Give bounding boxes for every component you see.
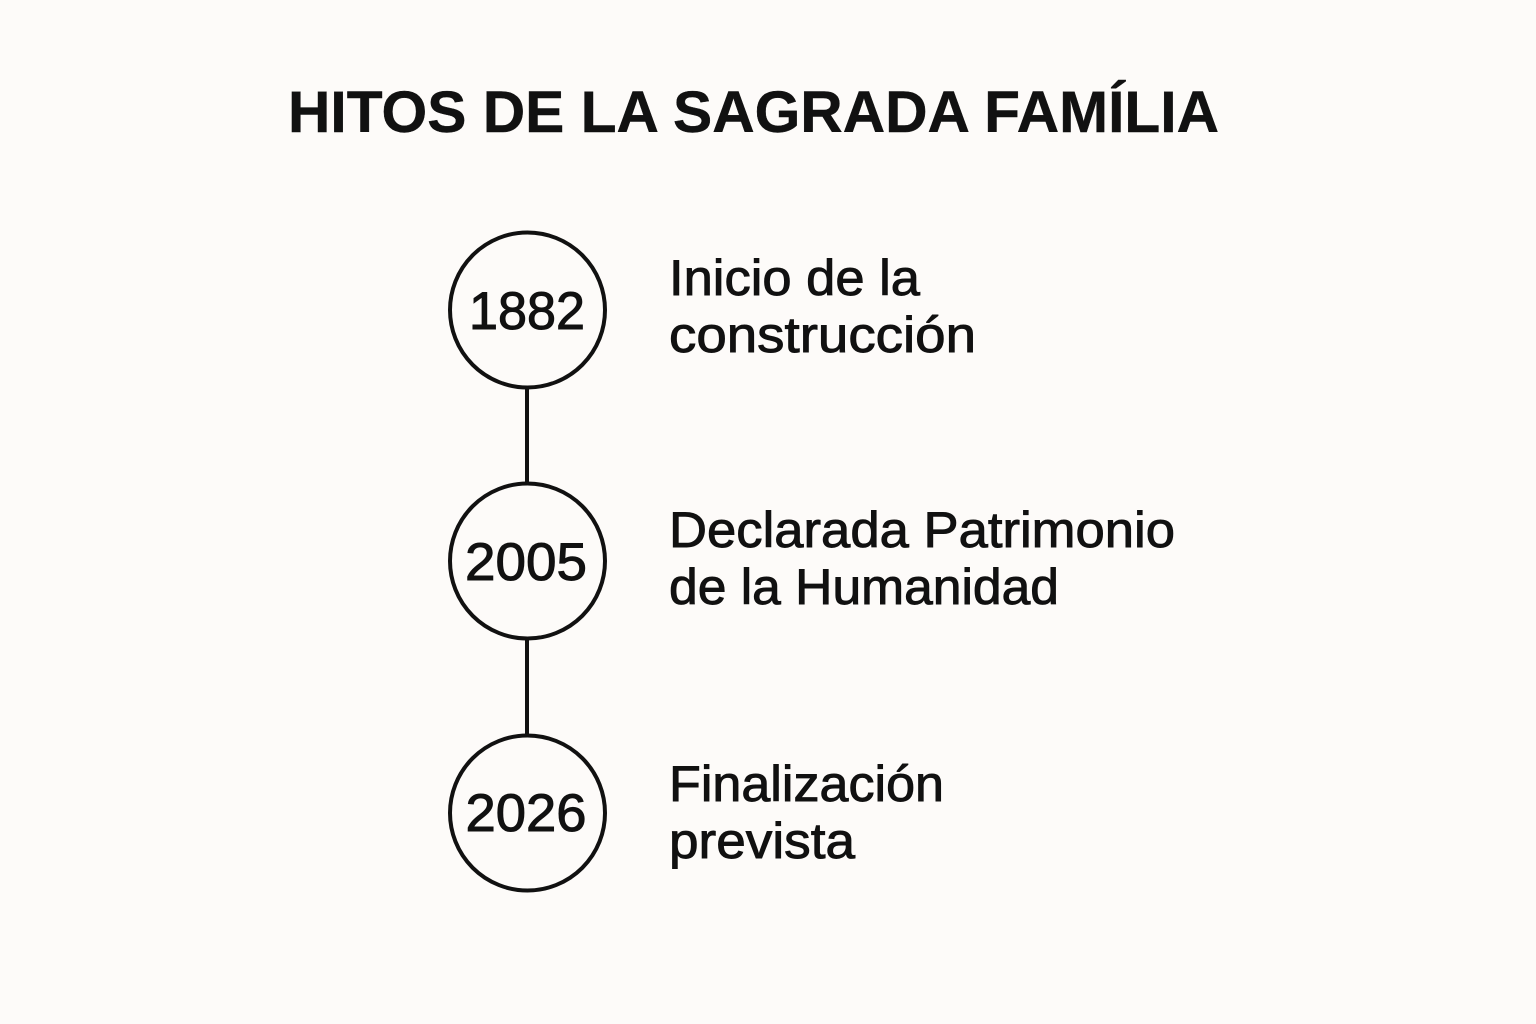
milestone: 2005: 2005 [465,533,587,592]
label: 2005: de la Humanidad [669,559,1059,615]
milestone: 1882 [450,232,605,388]
milestone: 2026: 2026 [466,784,586,843]
label: 2005: Declarada Patrimonio [669,502,1175,558]
label: 2026: Finalización [669,756,944,812]
title: HITOS DE LA SAGRADA FAMÍLIA [288,79,1219,145]
label: 2026: prevista [669,813,855,869]
label: 1882: Inicio de la [669,250,920,306]
connector: 1882 to 2005 [525,387,529,484]
milestone: 1882: 1882 [469,282,585,341]
milestone: 2005 [450,484,605,638]
milestone: 2026 [450,736,605,890]
label: 1882: construcción [669,307,976,363]
connector: 2005 to 2026 [525,638,529,736]
label: 1882 [669,250,976,363]
timeline [450,232,605,890]
label: 2026 [669,756,944,869]
label: 2005 [669,502,1175,615]
